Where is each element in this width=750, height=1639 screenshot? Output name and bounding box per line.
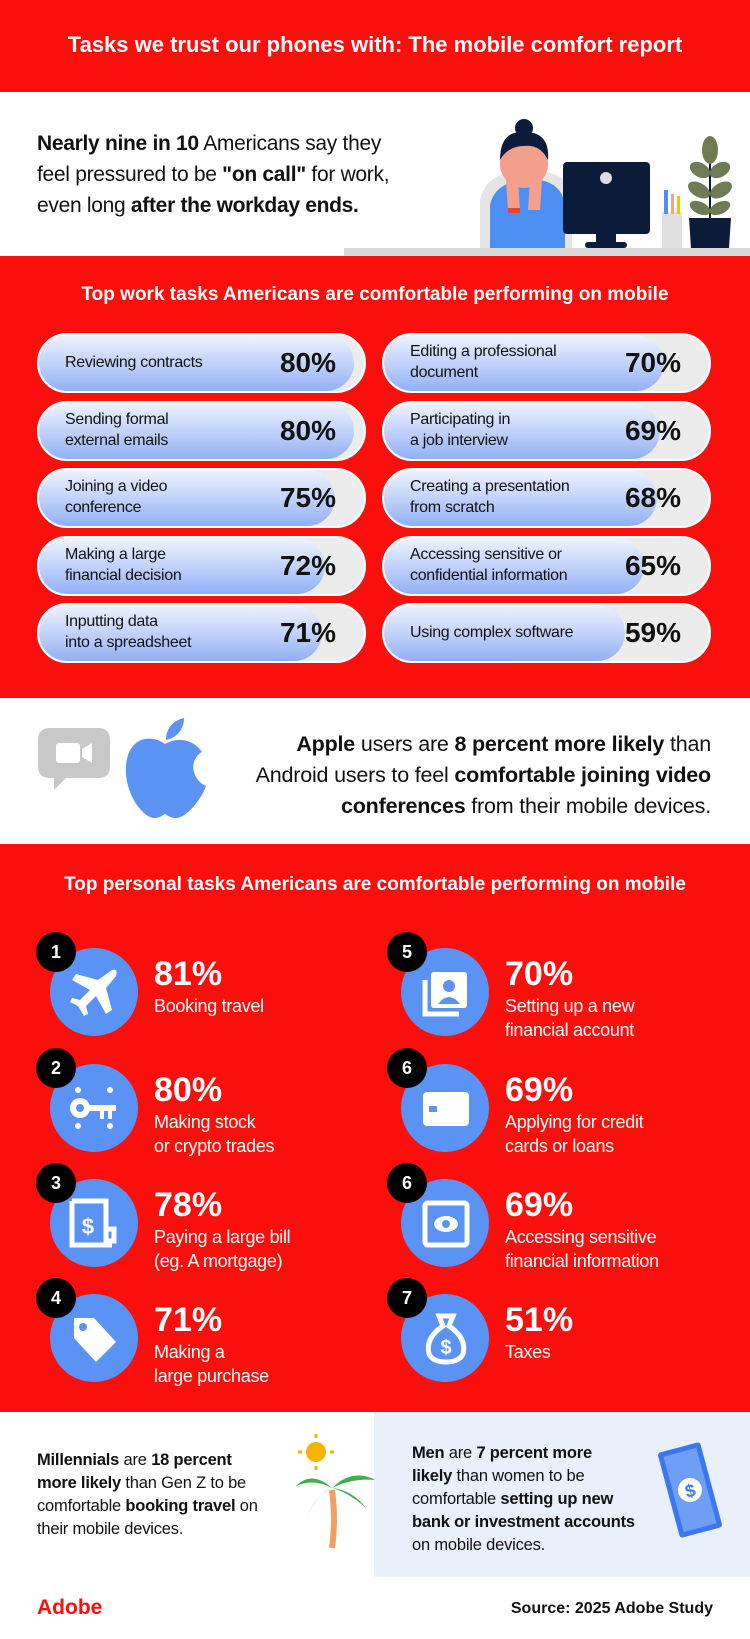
item 6 credit cards: 69% xyxy=(505,1071,573,1109)
men text: Men are 7 percent more xyxy=(412,1444,592,1462)
item 4 large purchase: 71% xyxy=(154,1301,222,1339)
item 6 credit cards xyxy=(387,1048,644,1156)
men text xyxy=(412,1444,635,1554)
item 1 booking travel xyxy=(36,932,264,1036)
intro text: Nearly nine in 10 Americans say they xyxy=(37,132,381,155)
millennials text: their mobile devices. xyxy=(37,1520,183,1538)
icon: apple logo xyxy=(126,718,206,818)
pill: Inputting data: 71% xyxy=(280,617,336,648)
intro text: even long after the workday ends. xyxy=(37,194,359,217)
pill: Joining a video conference: Joining a video xyxy=(65,478,167,495)
item 2 stock trades: or crypto trades xyxy=(154,1136,274,1156)
pill: Editing a professional document: document xyxy=(410,364,478,381)
pill: Editing a professional document: 70% xyxy=(625,347,681,378)
heading: personal tasks: Top personal tasks Americans are comfortable performing on mobile xyxy=(64,874,686,895)
pill: Participating in a job interview: a job interview xyxy=(410,432,508,449)
pill: Editing a professional document xyxy=(382,333,711,393)
pill: Making a large financial decision xyxy=(37,536,366,596)
item 5 new financial account xyxy=(387,932,635,1040)
pill: Editing a professional document: Editing a professional xyxy=(410,343,556,360)
header banner xyxy=(0,0,750,92)
item 3 paying bill: 3 xyxy=(51,1172,61,1192)
panel: men callout xyxy=(374,1412,750,1577)
millennials text: more likely than Gen Z to be xyxy=(37,1474,246,1492)
item 6 credit cards: Applying for credit xyxy=(505,1112,643,1132)
intro text xyxy=(37,132,389,217)
millennials text: comfortable booking travel on xyxy=(37,1497,258,1515)
pill: Reviewing contracts: Reviewing contracts xyxy=(65,354,202,371)
pill: Creating a presentation xyxy=(382,468,711,528)
apple stat text: Apple users are 8 percent more likely than Android users to feel comfortable joining video conferences from their mobile devices. xyxy=(256,732,711,818)
item 7 taxes: $ xyxy=(440,1337,452,1359)
item 4 large purchase: large purchase xyxy=(154,1366,269,1386)
men text: on mobile devices. xyxy=(412,1536,545,1554)
pill: Using complex software: Using complex software xyxy=(410,624,573,641)
item 2 stock trades: Making stock xyxy=(154,1112,255,1132)
title: Tasks we trust our phones with: The mobile comfort report xyxy=(68,32,682,57)
icon: palm tree and sun xyxy=(296,1434,374,1548)
intro text: feel pressured to be "on call" for work, xyxy=(37,163,389,186)
item 5 new financial account: Setting up a new xyxy=(505,996,634,1016)
item 6 credit cards: 6 xyxy=(402,1058,412,1078)
item 3 paying bill: Paying a large bill xyxy=(154,1227,290,1247)
pill: Making a large financial decision: Making a large xyxy=(65,546,166,563)
illustration: stressed worker at desk xyxy=(344,119,750,256)
item 3 paying bill: 78% xyxy=(154,1186,222,1224)
item 2 stock trades: 2 xyxy=(51,1058,61,1078)
item 5 new financial account: 70% xyxy=(505,955,573,993)
pill: Sending formal external emails xyxy=(37,401,366,461)
item 6b sensitive info xyxy=(387,1163,659,1271)
pill: Joining a video conference: 75% xyxy=(280,482,336,513)
item 6b sensitive info: financial information xyxy=(505,1251,659,1271)
pill: Creating a presentation: Creating a presentation xyxy=(410,478,569,495)
item 7 taxes: 51% xyxy=(505,1301,573,1339)
pill: Accessing sensitive info: 65% xyxy=(625,550,681,581)
heading: work tasks: Top work tasks Americans are comfortable performing on mobile xyxy=(81,284,669,305)
item 6b sensitive info: Accessing sensitive xyxy=(505,1227,656,1247)
source: Source: 2025 Adobe Study xyxy=(511,1600,713,1617)
men text: likely than women to be xyxy=(412,1467,584,1485)
icon: dollar bill xyxy=(658,1442,722,1538)
pill: Using complex software: 59% xyxy=(625,617,681,648)
item 6 credit cards: cards or loans xyxy=(505,1136,614,1156)
pill: Reviewing contracts: 80% xyxy=(280,347,336,378)
pill: Making a large financial decision: 72% xyxy=(280,550,336,581)
pill: Using complex software xyxy=(382,603,711,663)
item 2 stock trades xyxy=(36,1048,274,1156)
item 7 taxes: Taxes xyxy=(505,1342,551,1362)
pill: Inputting data xyxy=(37,603,366,663)
pill: Creating a presentation: 68% xyxy=(625,482,681,513)
icon: dollar bill: $ xyxy=(683,1480,698,1502)
item 7 taxes: 7 xyxy=(402,1288,412,1308)
item 3 paying bill xyxy=(36,1163,290,1271)
pill: Creating a presentation: from scratch xyxy=(410,499,494,516)
item 3 paying bill: $ xyxy=(82,1214,94,1239)
millennials text: Millennials are 18 percent xyxy=(37,1451,232,1469)
pill: Making a large financial decision: financial decision xyxy=(65,567,181,584)
pill: Sending formal external emails: external emails xyxy=(65,432,168,449)
pill: Accessing sensitive info: confidential information xyxy=(410,567,567,584)
pill: Joining a video conference: conference xyxy=(65,499,141,516)
pill: Participating in a job interview: 69% xyxy=(625,415,681,446)
panel: personal tasks xyxy=(0,844,750,1412)
men text: bank or investment accounts xyxy=(412,1513,635,1531)
item 5 new financial account: financial account xyxy=(505,1020,634,1040)
item 6b sensitive info: 6 xyxy=(402,1172,412,1192)
item 4 large purchase xyxy=(36,1278,269,1386)
pill: Reviewing contracts xyxy=(37,333,366,393)
item 5 new financial account: 5 xyxy=(402,942,412,962)
item 7 taxes xyxy=(387,1278,573,1382)
item 1 booking travel: Booking travel xyxy=(154,996,264,1016)
pill: Participating in a job interview xyxy=(382,401,711,461)
men text: comfortable setting up new xyxy=(412,1490,613,1508)
item 2 stock trades: 80% xyxy=(154,1071,222,1109)
pill: Sending formal external emails: 80% xyxy=(280,415,336,446)
pill: Sending formal external emails: Sending formal xyxy=(65,411,168,428)
logo: Adobe: Adobe xyxy=(37,1596,102,1619)
item 6b sensitive info: 69% xyxy=(505,1186,573,1224)
pill: Participating in a job interview: Participating in xyxy=(410,411,510,428)
pill: Inputting data: Inputting data xyxy=(65,613,158,630)
panel: work tasks xyxy=(0,256,750,698)
pill: Inputting data: into a spreadsheet xyxy=(65,634,191,651)
item 1 booking travel: 81% xyxy=(154,955,222,993)
item 4 large purchase: Making a xyxy=(154,1342,225,1362)
pill: Accessing sensitive info: Accessing sensitive or xyxy=(410,546,562,563)
pill: Accessing sensitive info xyxy=(382,536,711,596)
pill: Joining a video conference xyxy=(37,468,366,528)
icon: video call bubble xyxy=(38,728,110,790)
item 3 paying bill: (eg. A mortgage) xyxy=(154,1251,282,1271)
millennials text xyxy=(37,1451,258,1538)
item 4 large purchase: 4 xyxy=(51,1288,61,1308)
item 1 booking travel: 1 xyxy=(51,942,61,962)
